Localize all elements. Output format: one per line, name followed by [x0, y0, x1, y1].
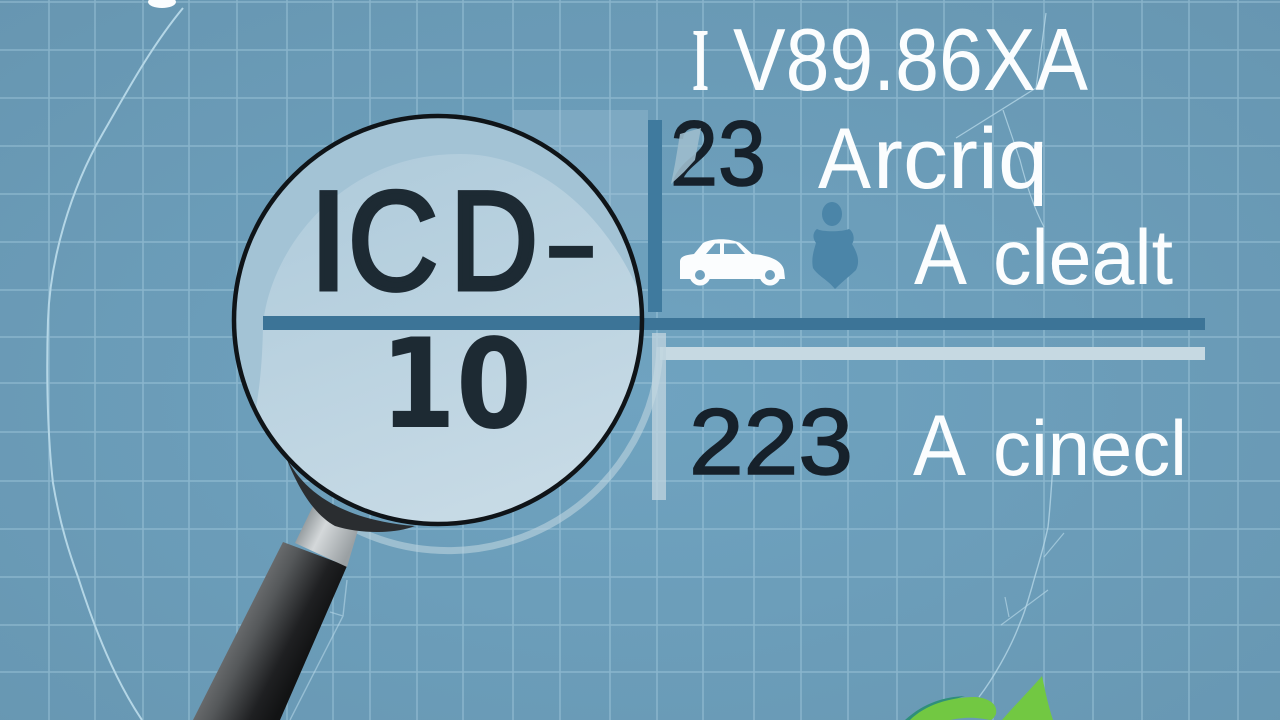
- divider inside lens: [263, 316, 641, 330]
- thin sketched arcs: [47, 8, 1064, 720]
- green recycling arrow icon: [905, 676, 1053, 720]
- row 2 label: [914, 207, 1173, 303]
- capital A: A: [913, 398, 967, 494]
- capital A: A: [818, 111, 872, 207]
- lens inner highlight: [256, 154, 640, 522]
- letter I: I: [309, 162, 348, 319]
- letter C: C: [348, 162, 438, 319]
- code text: V89.86XA: [733, 10, 1088, 109]
- hyphen: -: [542, 162, 600, 319]
- icon: car: [680, 239, 785, 286]
- letter D: D: [450, 162, 538, 319]
- lens glass: [233, 115, 643, 525]
- magnifying glass: [193, 115, 650, 720]
- lens: [232, 115, 650, 540]
- word: rcriq: [873, 111, 1048, 207]
- vertical dark divider: [648, 120, 662, 312]
- lens number: 10: [380, 313, 532, 457]
- row 1 label: [818, 111, 1048, 207]
- lens rim: [234, 116, 642, 524]
- horizontal light divider: [660, 347, 1205, 360]
- lens rear shadow: [284, 452, 415, 532]
- torn patch on first digit: [671, 128, 701, 184]
- vertical light divider: [652, 333, 666, 500]
- lens title: [309, 162, 600, 319]
- white blob at top edge: [148, 0, 176, 8]
- code heading: [692, 10, 1088, 110]
- word: clealt: [993, 213, 1173, 301]
- handle: [193, 542, 347, 720]
- code heading: I: [692, 11, 709, 110]
- arrow curve: [910, 697, 996, 720]
- metal collar: [295, 506, 358, 567]
- horizontal dark divider: [263, 318, 1205, 330]
- row 1 number: [670, 103, 766, 205]
- word: cinecl: [993, 404, 1187, 492]
- light ring below lens: [357, 347, 660, 551]
- icon: person silhouette: [812, 202, 858, 289]
- row 3 number: 223: [689, 389, 853, 494]
- arrow teal edge: [905, 696, 965, 720]
- row 3 label: [913, 398, 1187, 494]
- capital A: A: [914, 207, 968, 303]
- light backing panel: [513, 110, 648, 240]
- digits: 23: [670, 103, 766, 205]
- arrow head: [1002, 676, 1053, 720]
